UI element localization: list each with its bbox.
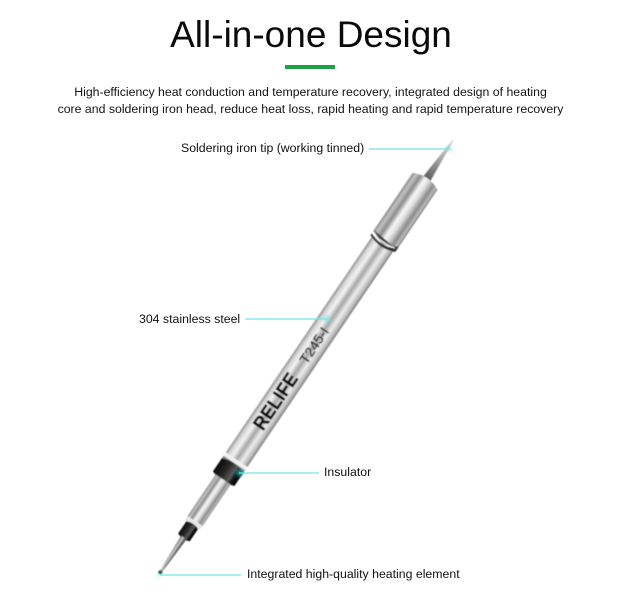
leader line: tip	[369, 148, 450, 150]
leader line: heating element	[160, 574, 241, 576]
shaft white band	[224, 452, 247, 470]
glow: needle	[156, 572, 162, 578]
brand mark: RELIFE	[250, 370, 302, 434]
main shaft	[224, 235, 394, 470]
insulator	[212, 456, 245, 488]
soldering iron body	[147, 132, 465, 582]
description text: High-efficiency heat conduction and temperature recovery, integrated design of heating	[74, 85, 547, 99]
glow: insulator	[236, 470, 244, 476]
description text	[58, 85, 564, 116]
model mark: T245-I	[296, 324, 332, 367]
lower ring	[177, 520, 199, 543]
label: tip: Soldering iron tip (working tinned)	[181, 141, 364, 155]
label: heating element: Integrated high-quality heating element	[247, 567, 460, 581]
glow: steel	[324, 316, 330, 322]
leader line: insulator	[239, 472, 319, 474]
wide collar	[371, 170, 440, 251]
green accent bar	[285, 65, 335, 69]
glow: tip	[446, 146, 452, 152]
label: steel: 304 stainless steel	[139, 312, 240, 326]
label: insulator: Insulator	[324, 465, 371, 479]
needle tip	[158, 569, 163, 575]
heating needle	[158, 536, 187, 573]
title: All-in-one Design	[170, 14, 452, 55]
working tip	[421, 137, 457, 184]
lower shaft	[187, 474, 231, 528]
leader line: steel	[245, 318, 327, 320]
collar rim	[369, 230, 399, 255]
description text: core and soldering iron head, reduce heat loss, rapid heating and rapid temperature recovery	[58, 102, 563, 116]
